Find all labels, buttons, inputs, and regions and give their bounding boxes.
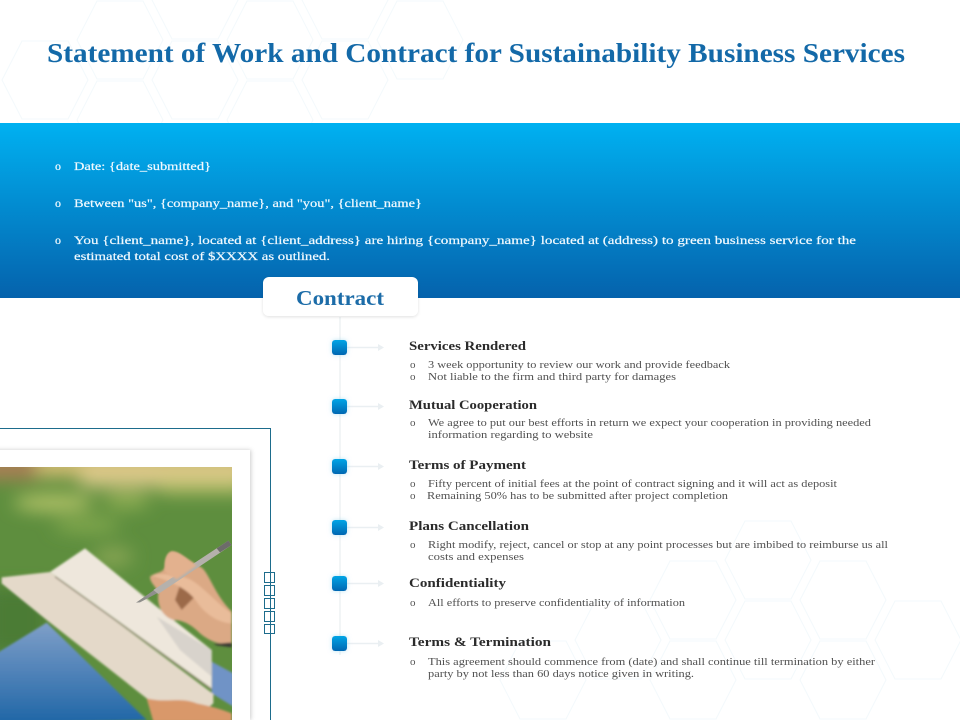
section: services rendered xyxy=(409,338,731,383)
photo card: hand writing in notebook xyxy=(0,450,253,720)
section: plans cancellation: Plans Cancellation xyxy=(409,518,530,533)
contract heading tab: Contract xyxy=(296,286,384,310)
section: terms of payment: o xyxy=(410,478,416,490)
node: terms and termination xyxy=(332,636,384,651)
section: terms of payment xyxy=(409,457,837,502)
section: terms of payment: Terms of Payment xyxy=(409,457,527,472)
node: mutual cooperation xyxy=(332,399,384,414)
section: terms of payment: Fifty percent of initial fees at the point of contract signing and it will act as deposit xyxy=(428,478,837,490)
section: mutual cooperation: information regarding to website xyxy=(428,429,593,441)
bullet: hiring terms xyxy=(55,233,856,263)
section: plans cancellation: Right modify, reject, cancel or stop at any point processes but are imbibed to reimburse us all xyxy=(428,539,888,551)
section: terms of payment: o xyxy=(410,490,416,502)
section: mutual cooperation: We agree to put our best efforts in return we expect your cooperation in providing needed xyxy=(428,417,872,429)
contract timeline xyxy=(332,317,384,655)
section: plans cancellation: costs and expenses xyxy=(428,551,524,563)
section: terms of payment: Remaining 50% has to be submitted after project completion xyxy=(427,490,729,502)
section: mutual cooperation: o xyxy=(410,417,416,429)
bullet: date: o xyxy=(55,159,61,173)
bullet: parties: Between "us", {company_name}, and "you", {client_name} xyxy=(74,196,422,210)
section: services rendered: Not liable to the firm and third party for damages xyxy=(428,371,676,383)
section: confidentiality: Confidentiality xyxy=(409,575,507,590)
decorative square chain icon xyxy=(264,572,274,634)
title: Statement of Work and Contract for Sustainability Business Services xyxy=(47,38,905,68)
section: confidentiality xyxy=(409,575,686,609)
section: plans cancellation: o xyxy=(410,539,416,551)
photo frame outline xyxy=(0,428,270,720)
bullet: hiring terms: You {client_name}, located at {client_address} are hiring {company_name} located at (address) to green business service for the xyxy=(74,233,856,247)
node: services rendered xyxy=(332,340,384,355)
section: terms and termination: party by not less than 60 days notice given in writing. xyxy=(428,668,694,680)
node: terms of payment xyxy=(332,459,384,474)
bullet: hiring terms: o xyxy=(55,233,61,247)
section: terms and termination: o xyxy=(410,656,416,668)
node: confidentiality xyxy=(332,576,384,591)
section: terms and termination: Terms & Termination xyxy=(409,634,552,649)
section: confidentiality: o xyxy=(410,597,416,609)
bullet: hiring terms: estimated total cost of $XXXX as outlined. xyxy=(74,249,330,263)
panel: blue summary band xyxy=(0,123,960,298)
bullet: date: Date: {date_submitted} xyxy=(74,159,211,173)
section: confidentiality: All efforts to preserve confidentiality of information xyxy=(428,597,686,609)
section: services rendered: Services Rendered xyxy=(409,338,527,353)
section: services rendered: o xyxy=(410,359,416,371)
section: mutual cooperation xyxy=(409,397,872,441)
contract heading tab xyxy=(263,277,418,316)
node: plans cancellation xyxy=(332,520,384,535)
section: services rendered: 3 week opportunity to review our work and provide feedback xyxy=(428,359,731,371)
section: plans cancellation xyxy=(409,518,888,563)
bullet: parties: o xyxy=(55,196,61,210)
section: terms and termination xyxy=(409,634,875,680)
section: terms and termination: This agreement should commence from (date) and shall continue till termination by either xyxy=(428,656,875,668)
section: mutual cooperation: Mutual Cooperation xyxy=(409,397,538,412)
section: services rendered: o xyxy=(410,371,416,383)
